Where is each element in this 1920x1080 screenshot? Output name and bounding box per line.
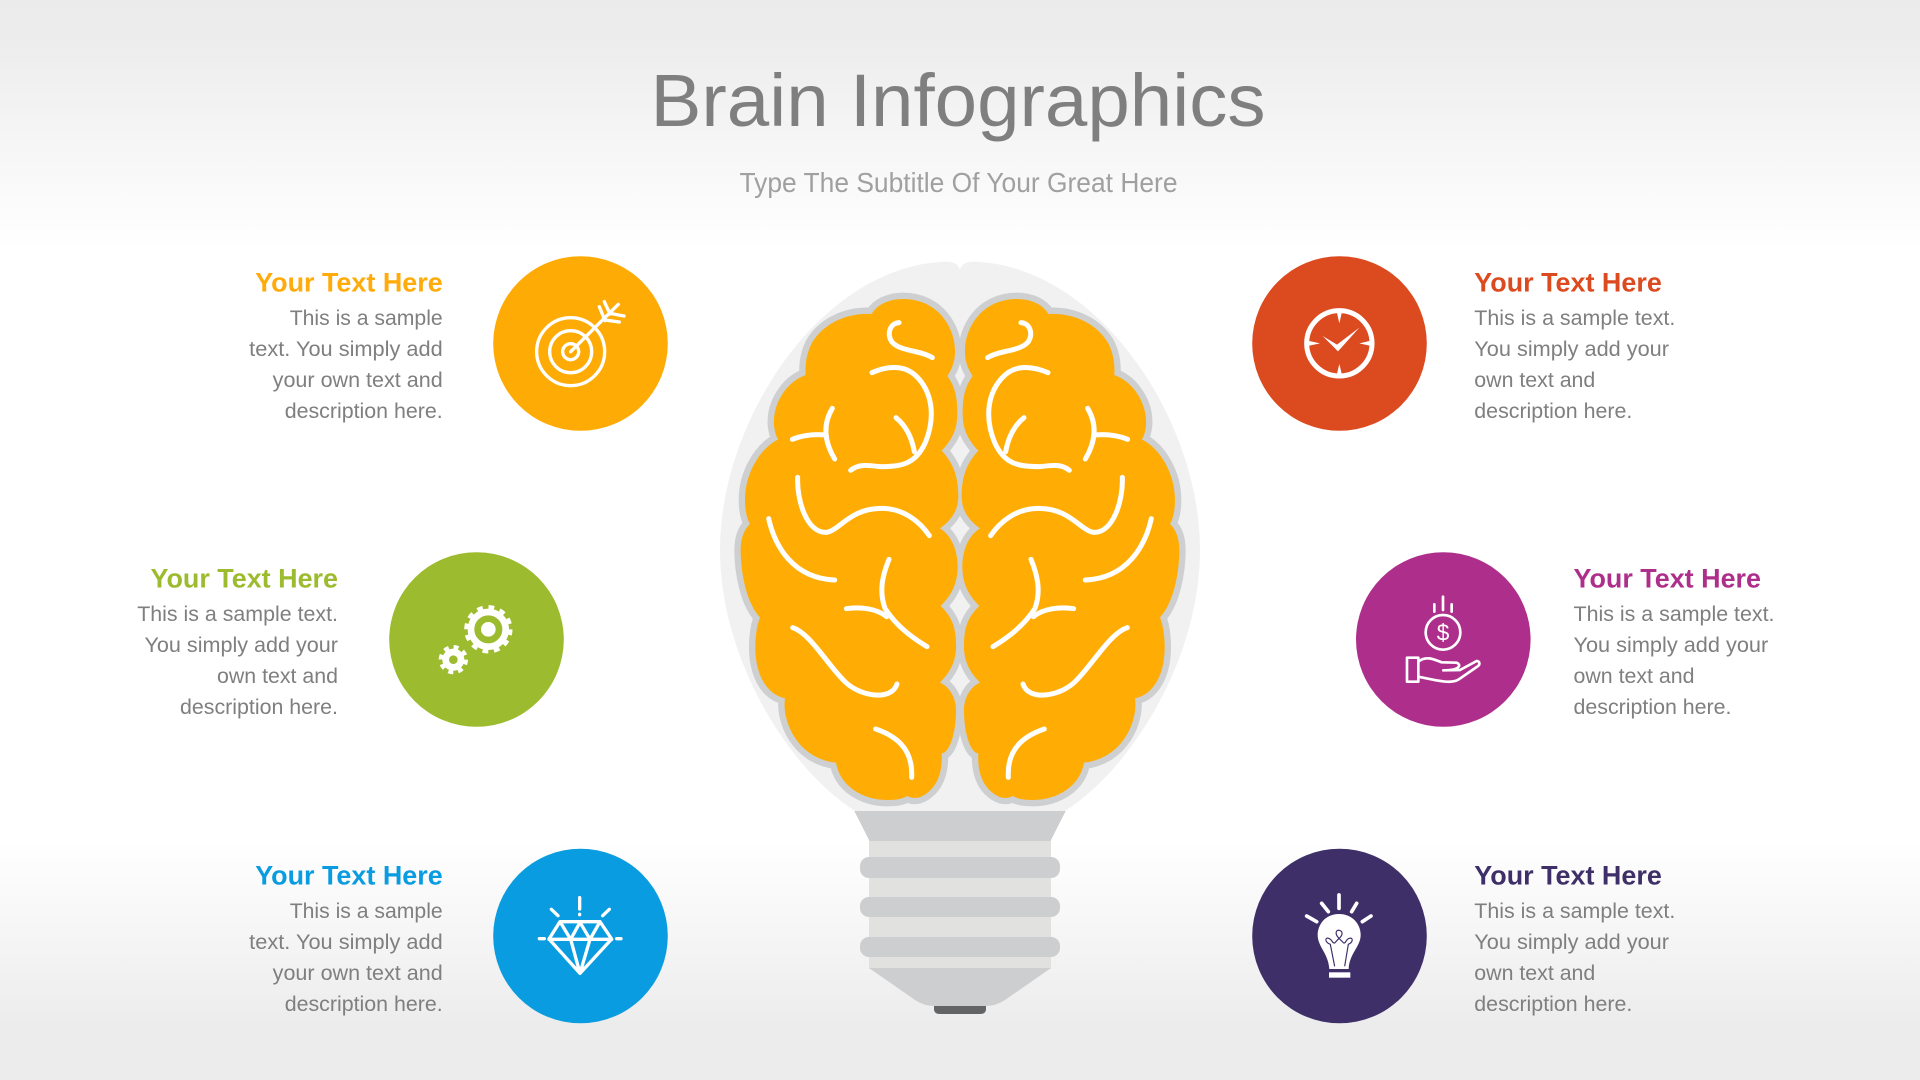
text block: purple: You simply add your	[1474, 930, 1669, 954]
text block: magenta: Your Text Here	[1574, 564, 1761, 594]
text block: blue: This is a sample	[290, 899, 443, 923]
text block: green	[137, 564, 338, 719]
light bulb with brain	[720, 262, 1200, 1014]
text block: green: description here.	[180, 695, 338, 719]
icon: diamond on blue circle	[493, 849, 668, 1023]
text block: green: You simply add your	[144, 633, 338, 657]
text block: green: This is a sample text.	[137, 602, 338, 626]
text block: green: own text and	[217, 664, 338, 688]
text block: blue: Your Text Here	[255, 860, 443, 890]
text block: purple: description here.	[1474, 992, 1632, 1016]
bulb screw base	[854, 811, 1066, 1014]
icon: coin and hand on magenta circle	[1356, 552, 1531, 727]
text block: blue	[249, 860, 443, 1016]
text block: purple: This is a sample text.	[1474, 899, 1675, 923]
text block: red: Your Text Here	[1474, 268, 1662, 298]
text block: orange: This is a sample	[290, 306, 443, 330]
icon: target on orange circle	[493, 256, 668, 431]
text block: orange: text. You simply add	[249, 337, 443, 361]
icon: light bulb on purple circle	[1252, 849, 1427, 1023]
text block: blue: description here.	[285, 992, 443, 1016]
text block: orange: Your Text Here	[255, 268, 443, 298]
text block: red	[1474, 268, 1675, 423]
text block: orange	[249, 268, 443, 423]
text block: magenta: description here.	[1574, 695, 1732, 719]
text block: red: You simply add your	[1474, 337, 1669, 361]
text block: red: This is a sample text.	[1474, 306, 1675, 330]
icon: gears on green circle	[389, 552, 564, 727]
text block: purple: Your Text Here	[1474, 860, 1662, 890]
text block: purple: own text and	[1474, 961, 1595, 985]
text block: red: description here.	[1474, 399, 1632, 423]
text block: blue: your own text and	[273, 961, 443, 985]
bulb glass	[720, 262, 1200, 811]
text block: red: own text and	[1474, 368, 1595, 392]
title: Brain Infographics	[650, 59, 1266, 142]
icon: coin and hand on magenta circle: $	[1437, 620, 1450, 646]
text block: orange: description here.	[285, 399, 443, 423]
text block: magenta: You simply add your	[1574, 633, 1768, 657]
subtitle: Type The Subtitle Of Your Great Here	[740, 167, 1178, 198]
text block: blue: text. You simply add	[249, 930, 443, 954]
icon: clock on red circle	[1252, 256, 1427, 431]
text block: magenta: own text and	[1574, 664, 1694, 688]
text block: magenta: This is a sample text.	[1574, 602, 1774, 626]
text block: orange: your own text and	[273, 368, 443, 392]
brain	[741, 299, 1179, 800]
text block: magenta	[1574, 564, 1774, 719]
text block: purple	[1474, 860, 1675, 1016]
text block: green: Your Text Here	[150, 564, 338, 594]
